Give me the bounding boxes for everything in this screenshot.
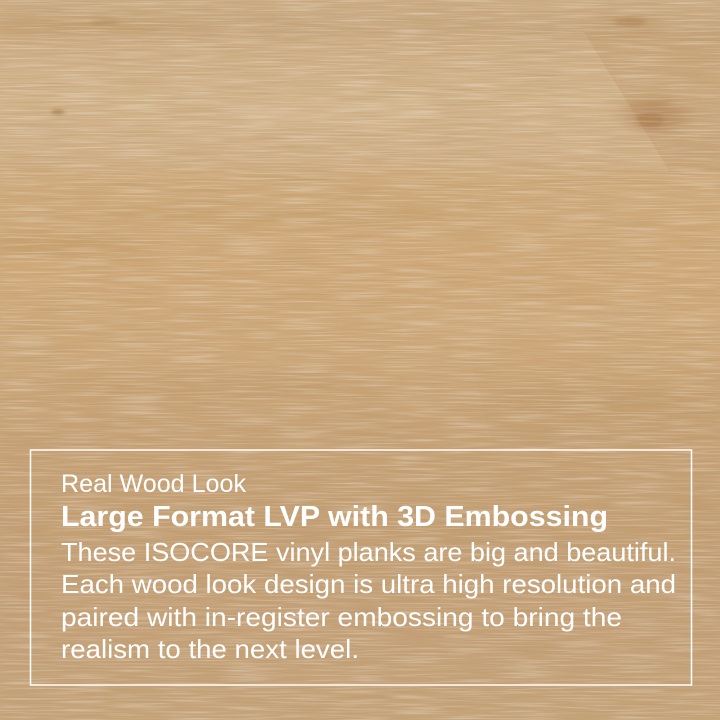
plank: upper right darker section <box>584 32 720 172</box>
heading: Large Format LVP with 3D Embossing <box>61 501 608 533</box>
plank: lower right section <box>470 358 720 442</box>
body text: realism to the next level. <box>61 634 359 664</box>
body text: These ISOCORE vinyl planks are big and beautiful. <box>61 537 676 567</box>
body text <box>61 537 676 664</box>
eyebrow: Real Wood Look <box>61 470 247 498</box>
callout border <box>30 450 692 685</box>
body text: paired with in-register embossing to bring the <box>61 602 622 632</box>
body text: Each wood look design is ultra high resolution and <box>61 569 676 599</box>
callout: text frame <box>30 450 692 685</box>
wood tone patches <box>0 15 710 414</box>
wood knots <box>51 18 664 127</box>
